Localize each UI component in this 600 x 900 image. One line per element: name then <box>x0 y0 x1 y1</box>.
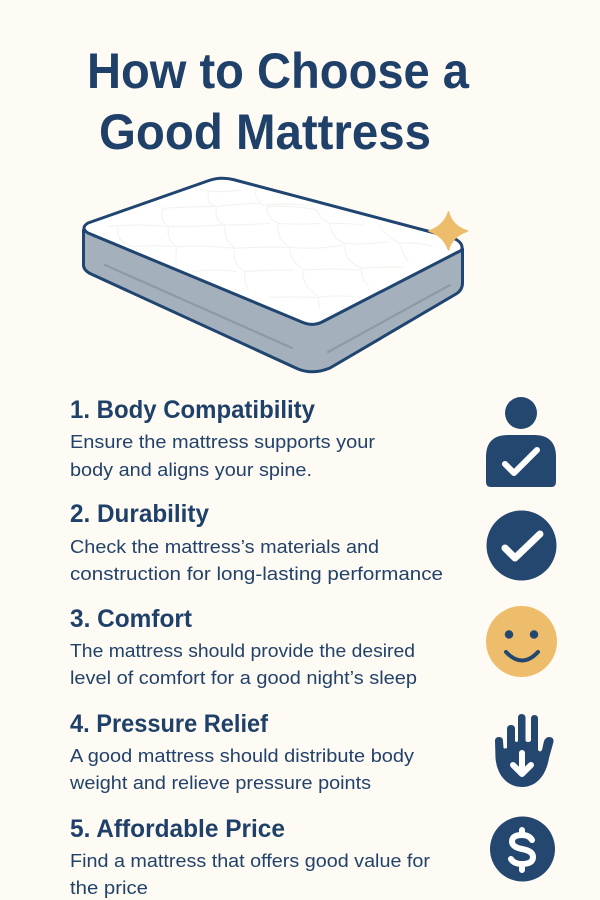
item 3: comfort <box>70 605 417 688</box>
item 4: pressure relief: A good mattress should distribute body <box>70 745 415 766</box>
item 3: comfort: 3. Comfort <box>70 605 193 633</box>
item 1: body compatibility: Ensure the mattress supports your <box>70 431 375 452</box>
icon: dollar coin <box>490 816 555 882</box>
title: Good Mattress <box>99 104 431 160</box>
item 2: durability: construction for long-lasting performance <box>70 563 443 584</box>
item 5: affordable price <box>70 815 430 898</box>
icon: smiley face <box>486 606 557 677</box>
icon: hand with down arrow <box>495 714 554 787</box>
icon: check circle <box>486 510 556 580</box>
item 2: durability: Check the mattress’s materials and <box>70 536 379 557</box>
item 5: affordable price: the price <box>70 877 148 898</box>
title: How to Choose a <box>87 43 470 99</box>
mattress side seams <box>105 265 450 352</box>
quilting pattern <box>108 190 432 308</box>
sparkle <box>429 212 468 250</box>
item 3: comfort: The mattress should provide the desired <box>70 640 415 661</box>
item 5: affordable price: 5. Affordable Price <box>70 815 285 843</box>
mattress top <box>84 178 462 324</box>
icon: person with check <box>486 397 556 487</box>
item 1: body compatibility: 1. Body Compatibility <box>70 396 315 424</box>
illustration: mattress <box>84 178 468 372</box>
item 4: pressure relief: 4. Pressure Relief <box>70 710 269 738</box>
item 2: durability <box>70 500 443 584</box>
item 4: pressure relief: weight and relieve pressure points <box>69 772 371 793</box>
item 1: body compatibility: body and aligns your spine. <box>70 459 312 480</box>
item 2: durability: 2. Durability <box>70 500 209 528</box>
item 3: comfort: level of comfort for a good night’s sleep <box>70 667 417 688</box>
item 1: body compatibility <box>70 396 375 480</box>
title <box>87 43 470 160</box>
mattress side <box>84 230 462 372</box>
item 4: pressure relief <box>69 710 415 793</box>
item 5: affordable price: Find a mattress that offers good value for <box>70 850 430 871</box>
